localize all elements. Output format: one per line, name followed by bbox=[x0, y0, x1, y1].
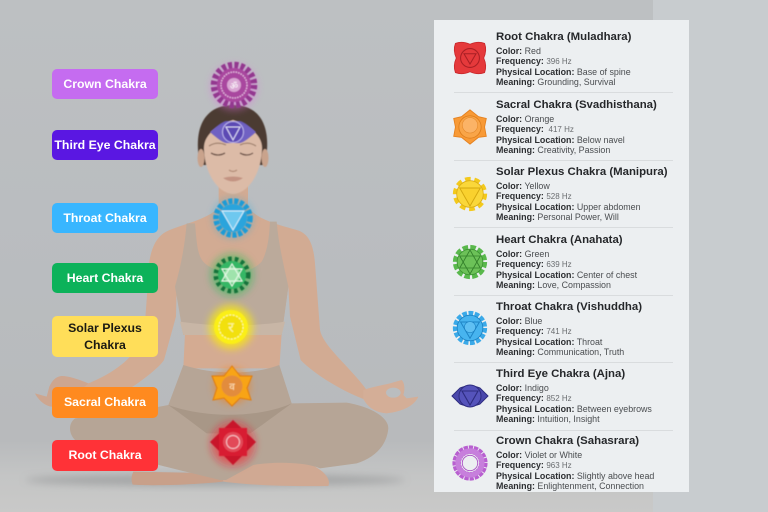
icon: sacral chakra bbox=[453, 109, 487, 145]
left hand bbox=[35, 376, 88, 407]
label: root chakra: Root Chakra bbox=[68, 448, 142, 462]
text: sacral chakra: Sacral Chakra (Svadhisthana) bbox=[496, 99, 657, 111]
text: third eye chakra: Meaning: Intuition, Insight bbox=[496, 414, 600, 424]
text: crown chakra: Crown Chakra (Sahasrara) bbox=[496, 435, 639, 447]
right hand bbox=[363, 380, 418, 413]
text: heart chakra: Physical Location: Center of chest bbox=[496, 270, 637, 280]
label: throat chakra: Throat Chakra bbox=[63, 210, 147, 224]
text: root chakra: Color: Red bbox=[496, 46, 541, 56]
text: third eye chakra: Color: Indigo bbox=[496, 383, 549, 393]
icon: crown chakra bbox=[452, 445, 488, 481]
text: solar plexus chakra: Frequency: 528 Hz bbox=[496, 191, 572, 201]
label: heart chakra: Heart Chakra bbox=[67, 270, 143, 284]
text: throat chakra: Meaning: Communication, Truth bbox=[496, 347, 624, 357]
text: third eye chakra bbox=[496, 368, 652, 424]
icon: solar plexus chakra bbox=[452, 176, 488, 212]
text: heart chakra: Heart Chakra (Anahata) bbox=[496, 234, 623, 246]
text: root chakra bbox=[496, 31, 631, 87]
icon: root chakra bbox=[454, 42, 486, 74]
text: throat chakra: Frequency: 741 Hz bbox=[496, 326, 572, 336]
text: sacral chakra: Meaning: Creativity, Passion bbox=[496, 145, 610, 155]
text: sacral chakra: Color: Orange bbox=[496, 114, 554, 124]
floor shadow bbox=[25, 474, 405, 486]
hair bbox=[198, 105, 267, 165]
chakra: throat bbox=[213, 198, 253, 238]
face bbox=[204, 120, 262, 194]
icon: heart chakra bbox=[452, 244, 488, 280]
text: heart chakra: Meaning: Love, Compassion bbox=[496, 280, 611, 290]
chakra: root bbox=[210, 420, 256, 466]
label: third eye chakra: Third Eye Chakra bbox=[54, 138, 156, 152]
leggings bbox=[70, 365, 388, 480]
text: solar plexus chakra: Color: Yellow bbox=[496, 181, 550, 191]
text: crown chakra: Meaning: Enlightenment, Connection bbox=[496, 481, 644, 491]
text: crown chakra bbox=[496, 435, 654, 491]
chakra: solar plexus: र bbox=[228, 317, 234, 337]
chakra: crown: ॐ bbox=[230, 81, 238, 91]
chakra: heart bbox=[211, 254, 253, 296]
label: solar plexus chakra: Solar Plexus bbox=[68, 320, 142, 334]
bra band bbox=[180, 322, 285, 335]
label: sacral chakra: Sacral Chakra bbox=[64, 395, 146, 409]
bra top bbox=[175, 222, 288, 335]
text: root chakra: Meaning: Grounding, Survival bbox=[496, 77, 615, 87]
label: root chakra bbox=[52, 440, 158, 471]
label: sacral chakra bbox=[52, 387, 158, 418]
label: third eye chakra bbox=[52, 130, 158, 160]
label: heart chakra bbox=[52, 263, 158, 293]
figure body bbox=[35, 183, 418, 486]
text: root chakra: Root Chakra (Muladhara) bbox=[496, 31, 631, 43]
panel: chakra reference list bbox=[434, 20, 689, 492]
chakra: sacral bbox=[212, 366, 252, 406]
text: crown chakra: Physical Location: Slightly above head bbox=[496, 471, 654, 481]
text: sacral chakra: Frequency: 417 Hz bbox=[496, 124, 574, 134]
text: throat chakra bbox=[496, 301, 642, 357]
text: sacral chakra bbox=[496, 99, 657, 155]
text: solar plexus chakra: Meaning: Personal Power, Will bbox=[496, 212, 619, 222]
right foot bbox=[220, 461, 329, 486]
gap inside right hand bbox=[386, 388, 401, 398]
left foot bbox=[132, 472, 223, 485]
leggings shading bbox=[168, 403, 292, 433]
lips bbox=[223, 176, 243, 182]
label: throat chakra bbox=[52, 203, 158, 233]
text: throat chakra: Color: Blue bbox=[496, 316, 542, 326]
chakra: third eye bbox=[210, 121, 256, 143]
head bbox=[198, 105, 268, 194]
label: crown chakra bbox=[52, 69, 158, 99]
text: third eye chakra: Third Eye Chakra (Ajna) bbox=[496, 368, 625, 380]
nose bbox=[229, 170, 237, 172]
label: crown chakra: Crown Chakra bbox=[63, 76, 147, 90]
midriff bbox=[183, 333, 282, 368]
text: heart chakra: Frequency: 639 Hz bbox=[496, 259, 572, 269]
text: root chakra: Physical Location: Base of spine bbox=[496, 67, 631, 77]
text: root chakra: Frequency: 396 Hz bbox=[496, 56, 572, 66]
chakra: sacral: व bbox=[229, 378, 235, 393]
text: third eye chakra: Frequency: 852 Hz bbox=[496, 393, 572, 403]
label: solar plexus chakra: Chakra bbox=[84, 338, 126, 352]
text: solar plexus chakra: Solar Plexus Chakra (Manipura) bbox=[496, 166, 668, 178]
text: solar plexus chakra bbox=[496, 166, 668, 222]
text: crown chakra: Color: Violet or White bbox=[496, 450, 582, 460]
chakra: crown bbox=[211, 64, 257, 110]
brows bbox=[209, 143, 256, 146]
closed eyes bbox=[211, 153, 253, 155]
text: heart chakra bbox=[496, 234, 638, 290]
icon: third eye chakra bbox=[451, 384, 489, 408]
text: solar plexus chakra: Physical Location: Upper abdomen bbox=[496, 202, 641, 212]
text: sacral chakra: Physical Location: Below navel bbox=[496, 135, 625, 145]
chakra: solar plexus bbox=[209, 305, 253, 349]
text: crown chakra: Frequency: 963 Hz bbox=[496, 460, 572, 470]
label: solar plexus chakra bbox=[52, 316, 158, 357]
text: third eye chakra: Physical Location: Between eyebrows bbox=[496, 404, 652, 414]
text: throat chakra: Physical Location: Throat bbox=[496, 337, 602, 347]
text: throat chakra: Throat Chakra (Vishuddha) bbox=[496, 301, 642, 313]
text: heart chakra: Color: Green bbox=[496, 249, 549, 259]
icon: throat chakra bbox=[452, 310, 488, 346]
ears bbox=[198, 149, 204, 167]
skin: neck shoulders arms bbox=[83, 183, 367, 399]
